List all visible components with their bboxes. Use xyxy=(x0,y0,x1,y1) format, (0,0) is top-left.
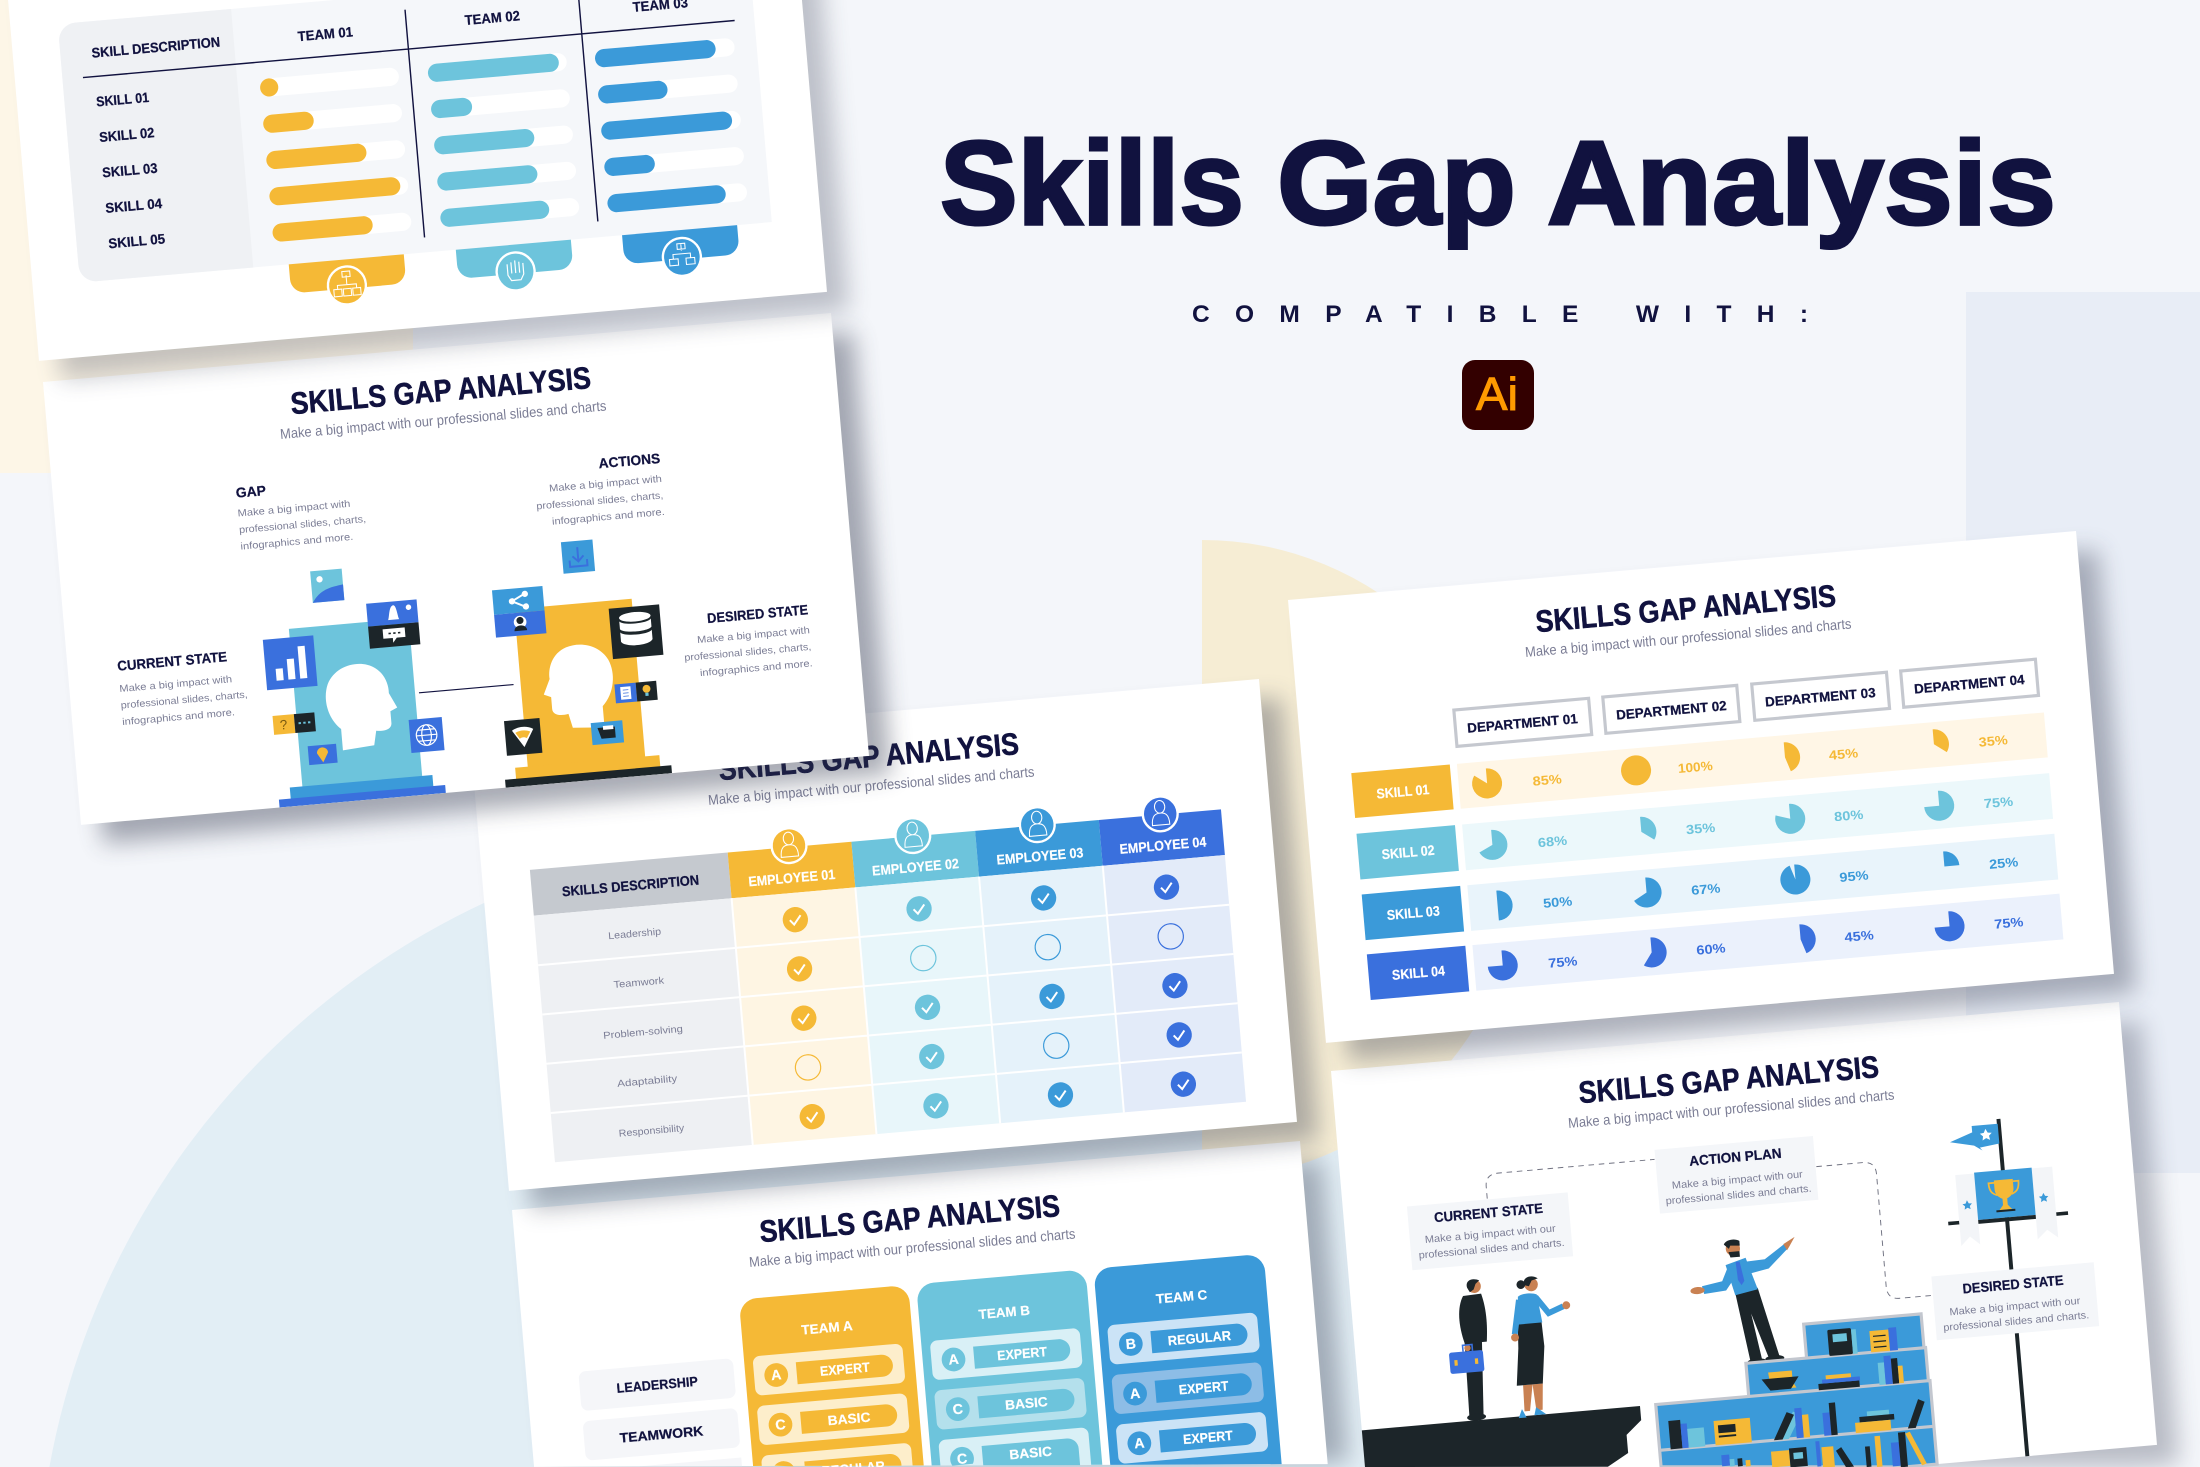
slide: department skills pie table: 25% xyxy=(1988,854,2019,872)
slide: team skill ratings: BASIC xyxy=(827,1410,871,1428)
slide: team skill bars: SKILL 03 xyxy=(102,160,158,180)
slide: employee checklist table xyxy=(471,677,1319,1211)
slide: team skill ratings: TEAM C xyxy=(1155,1287,1208,1307)
title: Analysis xyxy=(1547,117,2056,250)
slide: current and desired state heads: ? xyxy=(279,717,288,733)
slide: team skill ratings: SKILLS GAP ANALYSIS xyxy=(758,1188,1061,1249)
slide: current and desired state heads: professional slides, charts, xyxy=(239,514,366,536)
slide: current and desired state heads: GAP xyxy=(235,482,267,501)
slide: current and desired state heads: ACTIONS xyxy=(598,450,661,471)
slide: department skills pie table: 100% xyxy=(1677,758,1714,776)
slide: department skills pie table: SKILLS GAP ANALYSIS xyxy=(1534,578,1837,639)
slide: employee checklist table: SKILLS GAP ANALYSIS xyxy=(717,726,1020,787)
slide: action plan illustration: Make a big impact with our xyxy=(1424,1223,1557,1246)
slide: team skill ratings: C xyxy=(952,1401,964,1418)
slide: team skill ratings: TEAM A xyxy=(801,1318,854,1338)
slide: department skills pie table: 45% xyxy=(1828,745,1859,763)
slide: employee checklist table: EMPLOYEE 03 xyxy=(996,844,1084,868)
slide: team skill bars: TEAM 02 xyxy=(464,7,521,28)
slide: department skills pie table: SKILL 04 xyxy=(1391,962,1446,983)
background: grey-blue block right xyxy=(1966,292,2200,1173)
slide: current and desired state heads: infographics and more. xyxy=(122,707,235,728)
slide: employee checklist table: Responsibility xyxy=(618,1123,685,1140)
slide: team skill bars: TEAM 01 xyxy=(297,23,354,44)
slide: current and desired state heads: Make a big impact with our professional slides and charts xyxy=(279,398,607,443)
slide: team skill ratings: A xyxy=(948,1352,959,1369)
slide: current and desired state heads: infographics and more. xyxy=(700,658,813,679)
slide: department skills pie table: 67% xyxy=(1691,880,1721,898)
slide: department skills pie table: SKILL 02 xyxy=(1381,842,1435,862)
slide: employee checklist table: Leadership xyxy=(608,927,662,942)
slide: current and desired state heads: Make a big impact with xyxy=(119,674,233,695)
slide: team skill ratings: Make a big impact with our professional slides and charts xyxy=(748,1226,1076,1271)
slide: current and desired state heads: Make a big impact with xyxy=(549,474,662,495)
slide: department skills pie table: 50% xyxy=(1542,893,1573,911)
slide: department skills pie table: 45% xyxy=(1844,927,1875,945)
title: Gap xyxy=(1277,117,1516,250)
slide: team skill ratings: EXPERT xyxy=(1178,1378,1230,1398)
slide: team skill ratings: REGULAR xyxy=(1167,1328,1232,1348)
slide: department skills pie table: DEPARTMENT 03 xyxy=(1765,685,1876,710)
slide: current and desired state heads: professional slides, charts, xyxy=(684,642,812,664)
slide: department skills pie table: 35% xyxy=(1978,732,2009,750)
slide: team skill ratings: EXPERT xyxy=(997,1344,1048,1363)
background: cream block top left xyxy=(0,0,413,473)
slide: department skills pie table: DEPARTMENT 01 xyxy=(1467,711,1579,736)
slide: team skill ratings: LEADERSHIP xyxy=(616,1374,698,1396)
slide: action plan illustration: SKILLS GAP ANALYSIS xyxy=(1577,1049,1880,1110)
slide: team skill bars: SKILL 02 xyxy=(98,124,155,145)
icon: Adobe Illustrator logo xyxy=(1462,360,1534,430)
slide: employee checklist table: EMPLOYEE 02 xyxy=(871,855,960,879)
slide: team skill ratings: C xyxy=(775,1417,786,1434)
compatible with label: COMPATIBLE WITH: xyxy=(1192,301,1808,328)
slide: department skills pie table: 68% xyxy=(1537,833,1568,850)
slide: department skills pie table: 75% xyxy=(1548,953,1578,971)
slide: team skill bars: SKILL 05 xyxy=(108,230,166,251)
slide: action plan illustration: Make a big impact with our professional slides and charts xyxy=(1567,1087,1895,1132)
slide: current and desired state heads: infographics and more. xyxy=(240,532,354,553)
slide: team skill ratings: B xyxy=(1125,1336,1137,1353)
slide: current and desired state heads: CURRENT STATE xyxy=(117,648,228,674)
slide: employee checklist table: Make a big impact with our professional slides and charts xyxy=(707,764,1035,809)
slide: action plan illustration: professional slides and charts. xyxy=(1665,1184,1812,1207)
slide: team skill ratings xyxy=(512,1139,1348,1467)
slide: current and desired state heads: SKILLS GAP ANALYSIS xyxy=(289,360,592,421)
slide: team skill ratings: BASIC xyxy=(1004,1394,1049,1413)
slide: action plan illustration xyxy=(1331,1000,2179,1467)
background: pale blue circle xyxy=(49,830,1575,1467)
slide: current and desired state heads: Make a big impact with xyxy=(237,499,351,520)
slide: current and desired state heads: professional slides, charts, xyxy=(120,690,248,712)
slide: department skills pie table: DEPARTMENT 02 xyxy=(1616,698,1727,723)
slide: department skills pie table: DEPARTMENT 04 xyxy=(1913,672,2026,697)
icon: Adobe Illustrator logo: Ai xyxy=(1476,368,1518,420)
slide: employee checklist table: EMPLOYEE 04 xyxy=(1119,833,1207,857)
slide: department skills pie table: 95% xyxy=(1839,867,1870,885)
slide: team skill bars: SKILL DESCRIPTION xyxy=(91,34,221,61)
slide: team skill ratings: BASIC xyxy=(1009,1444,1053,1462)
slide: department skills pie table: 85% xyxy=(1532,771,1563,789)
slide: action plan illustration: ACTION PLAN xyxy=(1689,1145,1782,1169)
background: cream half circle xyxy=(1202,540,1522,1180)
slide: action plan illustration: professional slides and charts. xyxy=(1943,1310,2090,1334)
slide: current and desired state heads: professional slides, charts, xyxy=(536,490,664,512)
slide: action plan illustration: CURRENT STATE xyxy=(1433,1200,1543,1225)
slide: department skills pie table: 35% xyxy=(1685,820,1716,837)
slide: team skill bars: SKILL 04 xyxy=(105,195,163,216)
slide: department skills pie table: SKILL 03 xyxy=(1386,902,1441,923)
slide: team skill ratings: A xyxy=(770,1367,782,1384)
slide: current and desired state heads: Make a big impact with xyxy=(697,625,810,646)
slide: team skill ratings: EXPERT xyxy=(1182,1428,1234,1447)
slide: team skill ratings: A xyxy=(1134,1436,1145,1452)
slide: action plan illustration: Make a big impact with our xyxy=(1671,1169,1804,1192)
slide: department skills pie table xyxy=(1288,529,2136,1063)
slide: department skills pie table: 80% xyxy=(1834,807,1864,824)
slide: department skills pie table: SKILL 01 xyxy=(1376,781,1430,802)
slide: team skill ratings: EXPERT xyxy=(819,1360,871,1379)
slide: team skill ratings: TEAM B xyxy=(978,1303,1031,1322)
slide: team skill ratings: A xyxy=(1129,1386,1141,1403)
slide: team skill ratings: TEAMWORK xyxy=(619,1423,704,1446)
slide: action plan illustration: professional slides and charts. xyxy=(1418,1238,1565,1262)
slide: current and desired state heads: infographics and more. xyxy=(552,507,665,528)
slide: department skills pie table: Make a big impact with our professional slides and charts xyxy=(1524,616,1852,661)
slide: department skills pie table: 75% xyxy=(1994,914,2024,932)
slide: action plan illustration: Make a big impact with our xyxy=(1949,1296,2081,1318)
slide: current and desired state heads: DESIRED STATE xyxy=(706,601,809,626)
slide: employee checklist table: Adaptability xyxy=(617,1074,678,1090)
slide: team skill bars xyxy=(1,0,849,381)
title xyxy=(940,117,2056,250)
title: Skills xyxy=(940,117,1244,250)
slide: employee checklist table: EMPLOYEE 01 xyxy=(748,866,836,889)
slide: action plan illustration: DESIRED STATE xyxy=(1962,1272,2064,1297)
slide: employee checklist table: SKILLS DESCRIPTION xyxy=(561,871,700,899)
slide: current and desired state heads xyxy=(43,311,891,845)
slide: team skill bars: SKILL 01 xyxy=(95,89,150,110)
slide: department skills pie table: 75% xyxy=(1983,794,2014,811)
slide: employee checklist table: Problem-solving xyxy=(603,1024,683,1042)
slide: department skills pie table: 60% xyxy=(1696,940,1727,958)
slide: employee checklist table: Teamwork xyxy=(613,976,665,991)
